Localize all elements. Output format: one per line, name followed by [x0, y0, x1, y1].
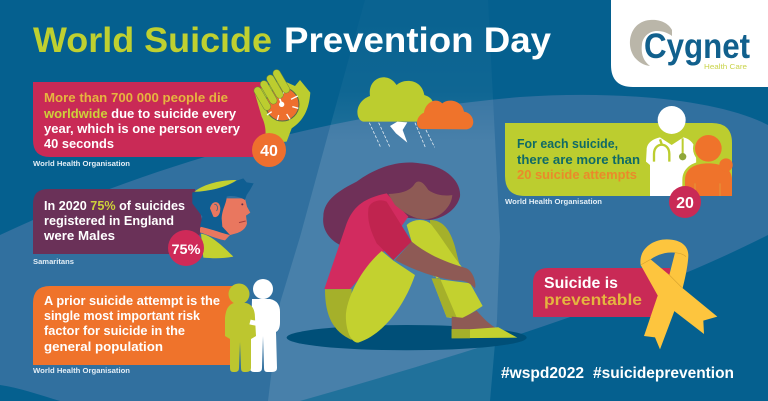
text: 20 attempts statistic	[517, 136, 640, 182]
title	[33, 21, 552, 60]
text: 75% statistic	[43, 198, 185, 243]
title: World Suicide	[33, 21, 272, 60]
hashtags: #suicideprevention	[593, 365, 734, 382]
illustration: seated woman hugging knees	[287, 162, 527, 350]
badge: 75%: 75%	[172, 241, 201, 257]
text: prior attempt statistic: general population	[44, 339, 163, 354]
panel: 700 000 deaths	[33, 73, 310, 168]
icon: swan swoosh	[630, 20, 672, 66]
icon: storm clouds	[357, 77, 473, 147]
badge: 20	[669, 186, 701, 218]
source: World Health Organisation: World Health Organisation	[33, 366, 130, 375]
text: prior attempt statistic: factor for suicide in the	[44, 323, 185, 338]
source: Samaritans: Samaritans	[33, 257, 74, 266]
text: 700 000 statistic: year, which is one person every	[44, 121, 241, 136]
source: World Health Organisation: World Health Organisation	[505, 197, 602, 206]
text: 700 000 statistic: More than 700 000 people die	[44, 90, 228, 105]
text: 20 attempts statistic: For each suicide,	[517, 136, 618, 151]
text: 20 attempts statistic: 20 suicide attempts	[517, 167, 637, 182]
text: 75% statistic: In 2020 75% of suicides	[44, 198, 185, 213]
icon: doctor with patient and child	[646, 106, 733, 196]
hashtags	[501, 365, 734, 382]
text: prior attempt statistic: A prior suicide attempt is the	[44, 293, 220, 308]
panel: 75% males	[33, 178, 254, 266]
text: prior attempt statistic	[44, 293, 220, 354]
text: prior attempt statistic: single most important risk	[44, 308, 201, 323]
text: 20 attempts statistic: there are more than	[517, 152, 640, 167]
hashtags: #wspd2022	[501, 365, 584, 382]
panel: prior attempt	[33, 279, 280, 375]
badge: 40: 40	[260, 143, 278, 160]
text: 700 000 statistic: 40 seconds	[44, 136, 114, 151]
text: Suicide is preventable	[544, 275, 642, 309]
text: 700 000 statistic	[43, 90, 241, 151]
icon: two supportive figures	[225, 279, 280, 372]
badge: 75%	[168, 230, 204, 266]
text: Suicide is preventable: preventable	[544, 292, 642, 309]
panel: 20 suicide attempts	[505, 106, 733, 218]
text: 700 000 statistic: worldwide due to suicide every	[43, 106, 237, 121]
badge: 40	[252, 133, 286, 167]
panel: Suicide is preventable	[533, 239, 717, 349]
badge: 20: 20	[676, 195, 694, 212]
text: 75% statistic: were Males	[43, 228, 115, 243]
icon: awareness ribbon	[640, 239, 717, 349]
icon: male head in profile	[192, 178, 254, 258]
icon: hand holding stopwatch	[254, 73, 310, 143]
text: 75% statistic: registered in England	[44, 213, 174, 228]
logo: Cygnet Health Care: Cygnet	[644, 27, 750, 66]
logo: Cygnet Health Care: Health Care	[704, 62, 747, 71]
logo: Cygnet Health Care	[611, 0, 768, 87]
source: World Health Organisation: World Health Organisation	[33, 159, 130, 168]
title: Prevention Day	[284, 21, 552, 60]
text: Suicide is preventable: Suicide is	[544, 275, 618, 292]
